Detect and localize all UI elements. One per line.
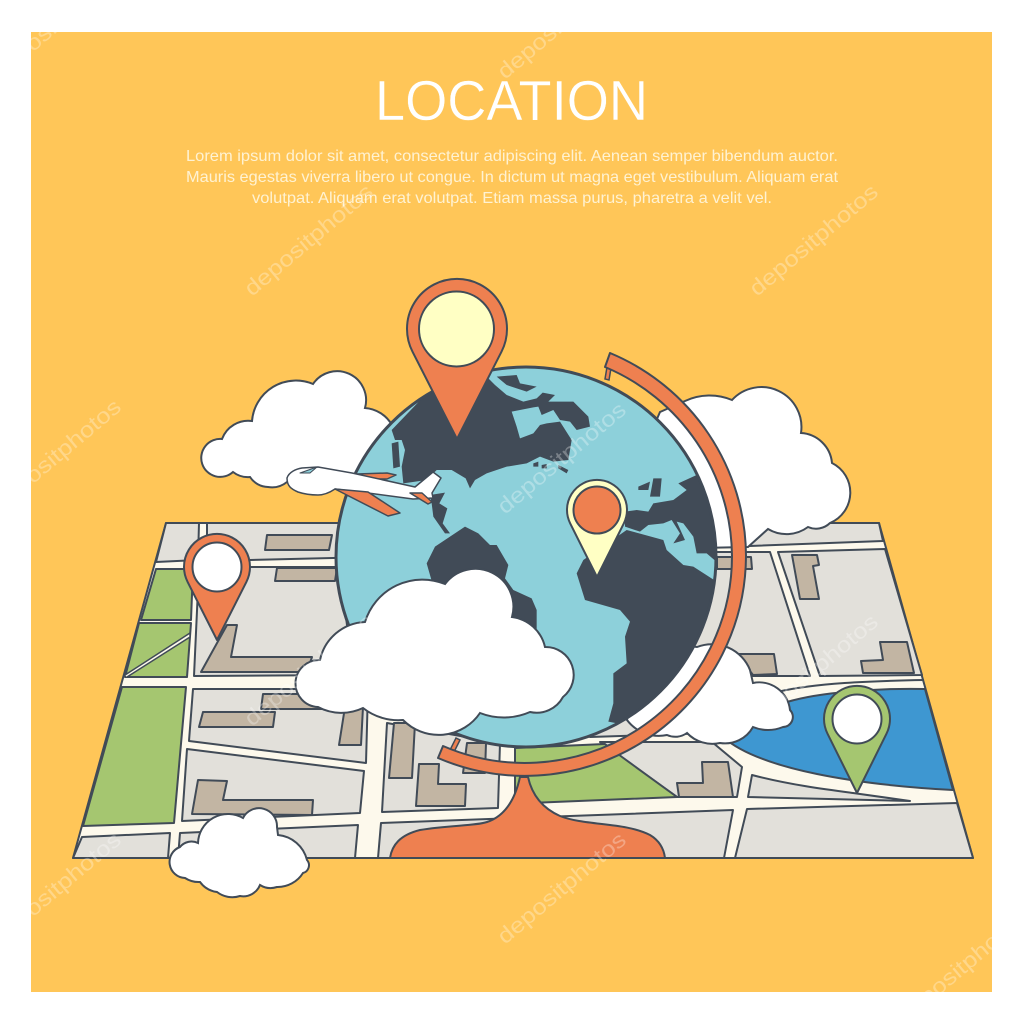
cloud: bottom left bbox=[170, 808, 309, 897]
cloud: back left bbox=[201, 371, 400, 495]
globe stand base bbox=[390, 777, 665, 858]
lake bbox=[723, 689, 953, 790]
watermarks: depositphotos bbox=[492, 397, 631, 519]
city map bbox=[73, 523, 973, 858]
pin: top orange bbox=[407, 279, 507, 439]
cloud: back lower right bbox=[627, 640, 793, 744]
watermarks: depositphotos bbox=[239, 609, 378, 731]
cloud: front center bbox=[295, 569, 574, 735]
South America bbox=[427, 527, 537, 637]
pin: map lake green bbox=[824, 686, 890, 793]
cloud: back right bbox=[600, 387, 850, 550]
pin: map left bbox=[184, 534, 250, 640]
curved road edge bbox=[777, 680, 924, 692]
globe ring bbox=[438, 353, 746, 776]
map blocks bbox=[73, 523, 973, 858]
continents bbox=[392, 375, 720, 737]
globe outline bbox=[336, 367, 716, 747]
parks bbox=[83, 569, 677, 826]
watermarks: depositphotos bbox=[744, 609, 883, 731]
Central America bbox=[430, 493, 450, 533]
description text bbox=[186, 148, 839, 207]
description text: Mauris egestas viverra libero ut congue. In dictum ut magna eget vestibulum. Aliquam erat bbox=[186, 169, 839, 186]
cockpit window bbox=[300, 467, 317, 473]
buildings bbox=[192, 535, 914, 815]
map base with roads bbox=[73, 523, 973, 858]
watermarks: depositphotos bbox=[492, 827, 631, 949]
Northern Europe islands bbox=[638, 478, 662, 497]
description text: Lorem ipsum dolor sit amet, consectetur adipiscing elit. Aenean semper bibendum auctor. bbox=[186, 148, 838, 165]
North America bbox=[392, 377, 590, 488]
Africa bbox=[576, 530, 714, 723]
fuselage bbox=[287, 467, 441, 499]
Pacific coast island bbox=[392, 442, 400, 468]
upper wing bbox=[357, 473, 396, 479]
description text: volutpat. Aliquam erat volutpat. Etiam massa purus, pharetra a velit vel. bbox=[252, 190, 772, 207]
Europe bbox=[625, 475, 718, 563]
Arctic islands bbox=[497, 375, 537, 392]
park path bbox=[125, 633, 190, 677]
tail wing bbox=[410, 493, 432, 504]
Caribbean islands bbox=[533, 462, 568, 473]
lower wing bbox=[335, 489, 400, 516]
airplane bbox=[287, 467, 441, 516]
globe pivot pins bbox=[450, 367, 611, 752]
watermarks: depositphotos bbox=[239, 179, 378, 301]
title: LOCATION bbox=[375, 69, 648, 133]
ocean bbox=[336, 367, 716, 747]
globe bbox=[336, 367, 720, 747]
watermarks: depositphotos bbox=[744, 179, 883, 301]
pin: globe yellow bbox=[567, 480, 627, 577]
